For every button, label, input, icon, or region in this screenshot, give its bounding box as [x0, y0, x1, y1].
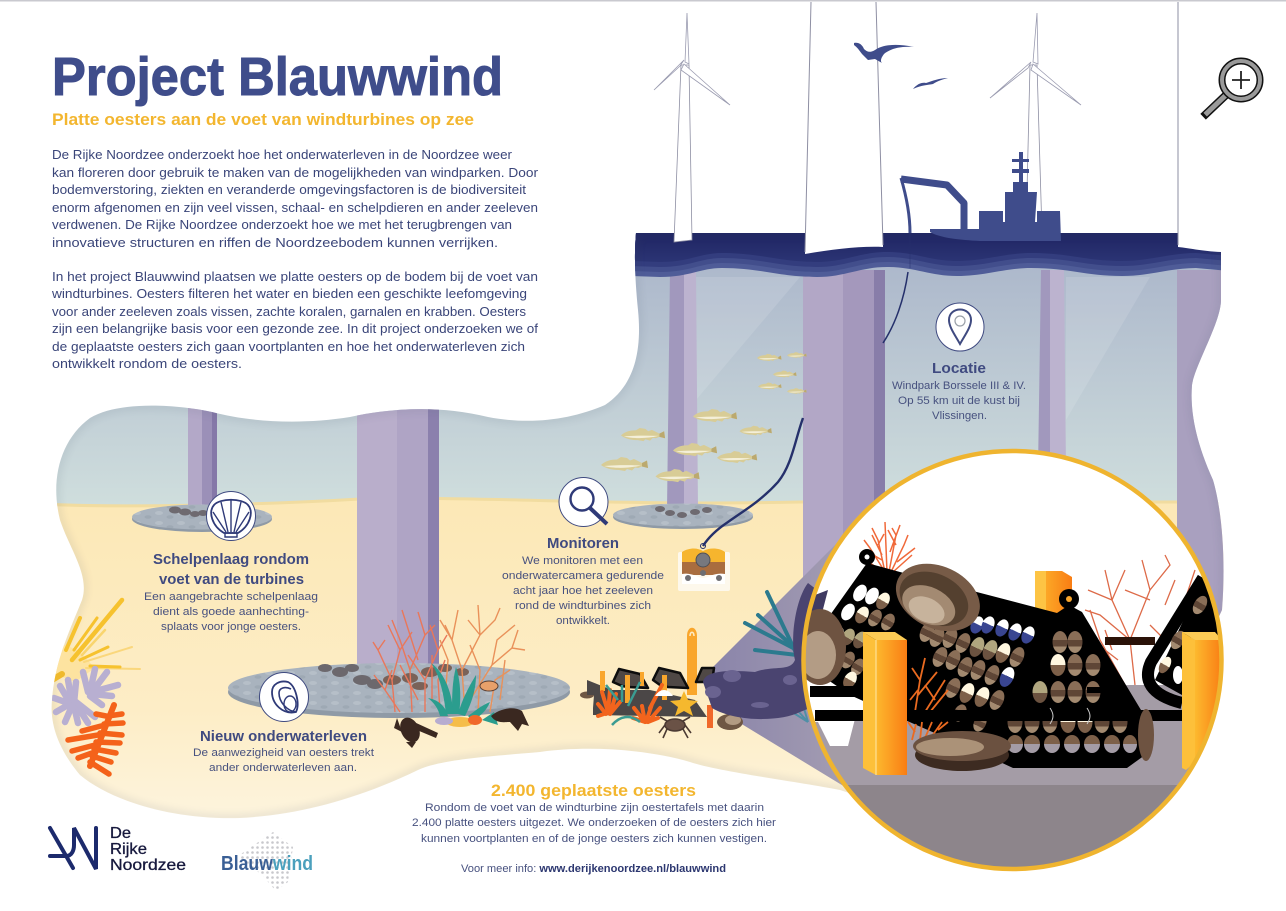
body: Een aangebrachte schelpenlaag [144, 591, 318, 603]
tower edges [805, 2, 1178, 252]
seaweed [428, 663, 490, 720]
intro paragraph 1: enorm afgenomen en zijn veel vissen, schaal- en schelpdieren en ander zeeleven [52, 200, 538, 215]
intro paragraph 1: kan floreren door gebruik te maken van de mogelijkheden van windparken. Door [52, 165, 539, 180]
third frame right [1148, 570, 1222, 703]
platform: large front [228, 663, 570, 718]
horizontal bars [810, 686, 1182, 721]
heading: Schelpenlaag rondom [153, 551, 309, 568]
cable to camera [703, 233, 910, 546]
school of fish small [757, 352, 807, 394]
icon: oyster [260, 672, 308, 722]
branching coral orange [440, 605, 525, 712]
icon: location pin [936, 303, 984, 351]
upper thin bar [1105, 637, 1155, 645]
orange coral small [908, 658, 948, 740]
oyster top [896, 564, 980, 632]
logo: Blauwwind [221, 832, 313, 891]
pillar: back centre [667, 270, 698, 510]
heading: 2.400 geplaatste oesters [491, 781, 696, 800]
body: Rondom de voet van de windturbine zijn oestertafels met daarin [425, 802, 764, 814]
water background [56, 267, 1221, 504]
platform: small left [132, 504, 272, 532]
coral and animals on large platform [373, 605, 529, 748]
branching coral red [373, 610, 447, 712]
right frame holes [1007, 631, 1137, 753]
logo wordmark: Rijke [110, 841, 147, 858]
callout: nieuw onderwaterleven [193, 672, 375, 774]
lavender coral left [54, 669, 118, 723]
tower: centre large white [805, 0, 883, 254]
post front right [1182, 632, 1222, 770]
coral right [1085, 555, 1195, 685]
body: ander onderwaterleven aan. [209, 762, 357, 774]
yellow coral left [50, 600, 140, 682]
pillar: right back [1038, 270, 1066, 470]
intro paragraph 2: voor ander zeeleven zoals vissen, zachte koralen, garnalen en krabben. Oesters [52, 304, 526, 319]
intro paragraph 2: In het project Blauwwind plaatsen we platte oesters op de bodem bij de voet van [52, 269, 538, 284]
intro paragraph 2: de geplaatste oesters zich gaan voortplanten en hoe het onderwaterleven zich [52, 339, 525, 354]
dark purple shells [703, 583, 830, 719]
body [412, 802, 776, 845]
ship [901, 152, 1061, 241]
platform: small centre [613, 504, 753, 529]
post back [1035, 571, 1072, 616]
body: De aanwezigheid van oesters trekt [193, 747, 375, 759]
callout: monitoren [502, 478, 664, 627]
title: Project Blauwwind [52, 47, 503, 107]
callout: locatie [892, 303, 1026, 422]
oyster bottom [913, 731, 1011, 771]
magnifier zoom icon [1206, 61, 1260, 114]
heading [153, 551, 309, 588]
oyster right under frame [1138, 709, 1154, 761]
lobster [394, 714, 438, 748]
small crab [480, 681, 498, 691]
logo: De Rijke Noordzee [50, 825, 186, 874]
sea bed sand [52, 497, 1224, 818]
magnified dark oyster mass [703, 583, 830, 722]
table posts [600, 671, 667, 703]
heading: Monitoren [547, 535, 619, 552]
top edge line [0, 0, 1286, 2]
table frames [613, 668, 714, 688]
panel: underwater scene [40, 218, 1240, 850]
magnified circle: oyster table [794, 451, 1230, 875]
body: 2.400 platte oesters uitgezet. We onderzoeken of de oesters zich hier [412, 817, 776, 829]
intro paragraph 1 [52, 147, 539, 250]
post front left [863, 632, 907, 775]
middle frame holes [917, 614, 1037, 734]
logo dots [238, 832, 293, 891]
left dark shells in circle [812, 590, 828, 612]
crab [659, 717, 691, 738]
sky with white turbine towers [805, 0, 1225, 254]
inner edge shadow [52, 336, 848, 818]
small reef base [435, 712, 498, 727]
pillar: far right [1177, 270, 1224, 616]
floor dark [848, 785, 1177, 867]
body [502, 555, 664, 627]
heading: Nieuw onderwaterleven [200, 728, 367, 745]
left frame holes [841, 584, 895, 686]
intro paragraph 1: verdwenen. De Rijke Noordzee onderzoekt hoe we met het terugbrengen van [52, 217, 512, 232]
logo wordmark: De [110, 825, 131, 842]
logo mark [50, 828, 96, 869]
subtitle: Platte oesters aan de voet van windturbines op zee [52, 110, 474, 129]
body [193, 747, 375, 774]
small shell [580, 692, 594, 698]
tall buoy post [687, 628, 697, 695]
callout: 2.400 geplaatste oesters [412, 781, 776, 845]
white shells [655, 690, 673, 696]
intro paragraph 2: zijn een belangrijke basis voor een gezonde zee. In dit project onderzoeken we of [52, 321, 538, 336]
sea surface waves [634, 233, 1221, 277]
pillar: front large [357, 405, 439, 680]
orange coral left [68, 705, 123, 774]
oyster left [806, 609, 846, 685]
callout: schelpenlaag [144, 492, 318, 633]
logo wordmark [110, 825, 186, 874]
body: Op 55 km uit de kust bij [898, 395, 1020, 407]
table frame main [815, 549, 1152, 768]
coral top [863, 522, 915, 572]
floor light [815, 685, 1190, 785]
body: We monitoren met een [522, 555, 643, 567]
bird large [854, 43, 914, 63]
turbine right [990, 13, 1081, 233]
light rays [696, 277, 1150, 330]
blue coral [788, 695, 808, 722]
body [892, 380, 1026, 422]
pillar: centre large [803, 270, 885, 600]
body: ontwikkelt. [556, 615, 610, 627]
body [144, 591, 318, 633]
starfish [670, 691, 698, 716]
table base [587, 680, 707, 717]
shackle hooks [1050, 708, 1090, 724]
circle border [804, 451, 1222, 869]
intro paragraph 2 [51, 269, 538, 371]
logo wordmark: Noordzee [110, 857, 186, 874]
intro paragraph 2: windturbines. Oesters filteren het water en bieden een geschikte leefomgeving [51, 286, 527, 301]
intro paragraph 1: De Rijke Noordzee onderzoekt hoe het onderwaterleven in de Noordzee weer [52, 147, 513, 162]
body: Vlissingen. [932, 410, 987, 422]
body: kunnen voortplanten en of de jonge oesters zich kunnen vestigen. [421, 833, 767, 845]
tower: far right white [1178, 0, 1225, 252]
intro paragraph 1: bodemverstoring, ziekten en veranderde omgevingsfactoren is de biodiversiteit [52, 182, 526, 197]
icon: scallop shell [206, 492, 256, 540]
body: acht jaar hoe het zeeleven [513, 585, 653, 597]
icon: magnifying glass [559, 478, 608, 526]
lower orange post [707, 705, 713, 728]
more info link: Voor meer info: www.derijkenoordzee.nl/blauwwind [461, 863, 726, 875]
bird small [913, 78, 948, 89]
heading: voet van de turbines [159, 571, 304, 588]
orange corals [598, 685, 662, 722]
intro paragraph 2: ontwikkelt rondom de oesters. [52, 356, 242, 371]
body: splaats voor jonge oesters. [161, 621, 301, 633]
beam from oyster table to magnified circle [712, 530, 850, 790]
underwater camera [678, 544, 730, 591]
logo wordmark: Blauwwind [221, 853, 313, 875]
oyster table small [580, 628, 743, 738]
pillar: small left [188, 405, 217, 510]
turbine left [654, 13, 730, 242]
body: dient als goede aanhechting- [153, 606, 309, 618]
teal weed [606, 682, 640, 725]
school of fish large [601, 409, 772, 482]
body: Windpark Borssele III & IV. [892, 380, 1026, 392]
heading: Locatie [932, 360, 986, 377]
oyster shells [717, 714, 743, 730]
dark crab [491, 708, 529, 731]
body: rond de windturbines zich [515, 600, 651, 612]
intro paragraph 1: innovatieve structuren en riffen de Noordzeebodem kunnen verrijken. [52, 235, 498, 250]
body: onderwatercamera gedurende [502, 570, 664, 582]
teal fronds [745, 592, 797, 655]
